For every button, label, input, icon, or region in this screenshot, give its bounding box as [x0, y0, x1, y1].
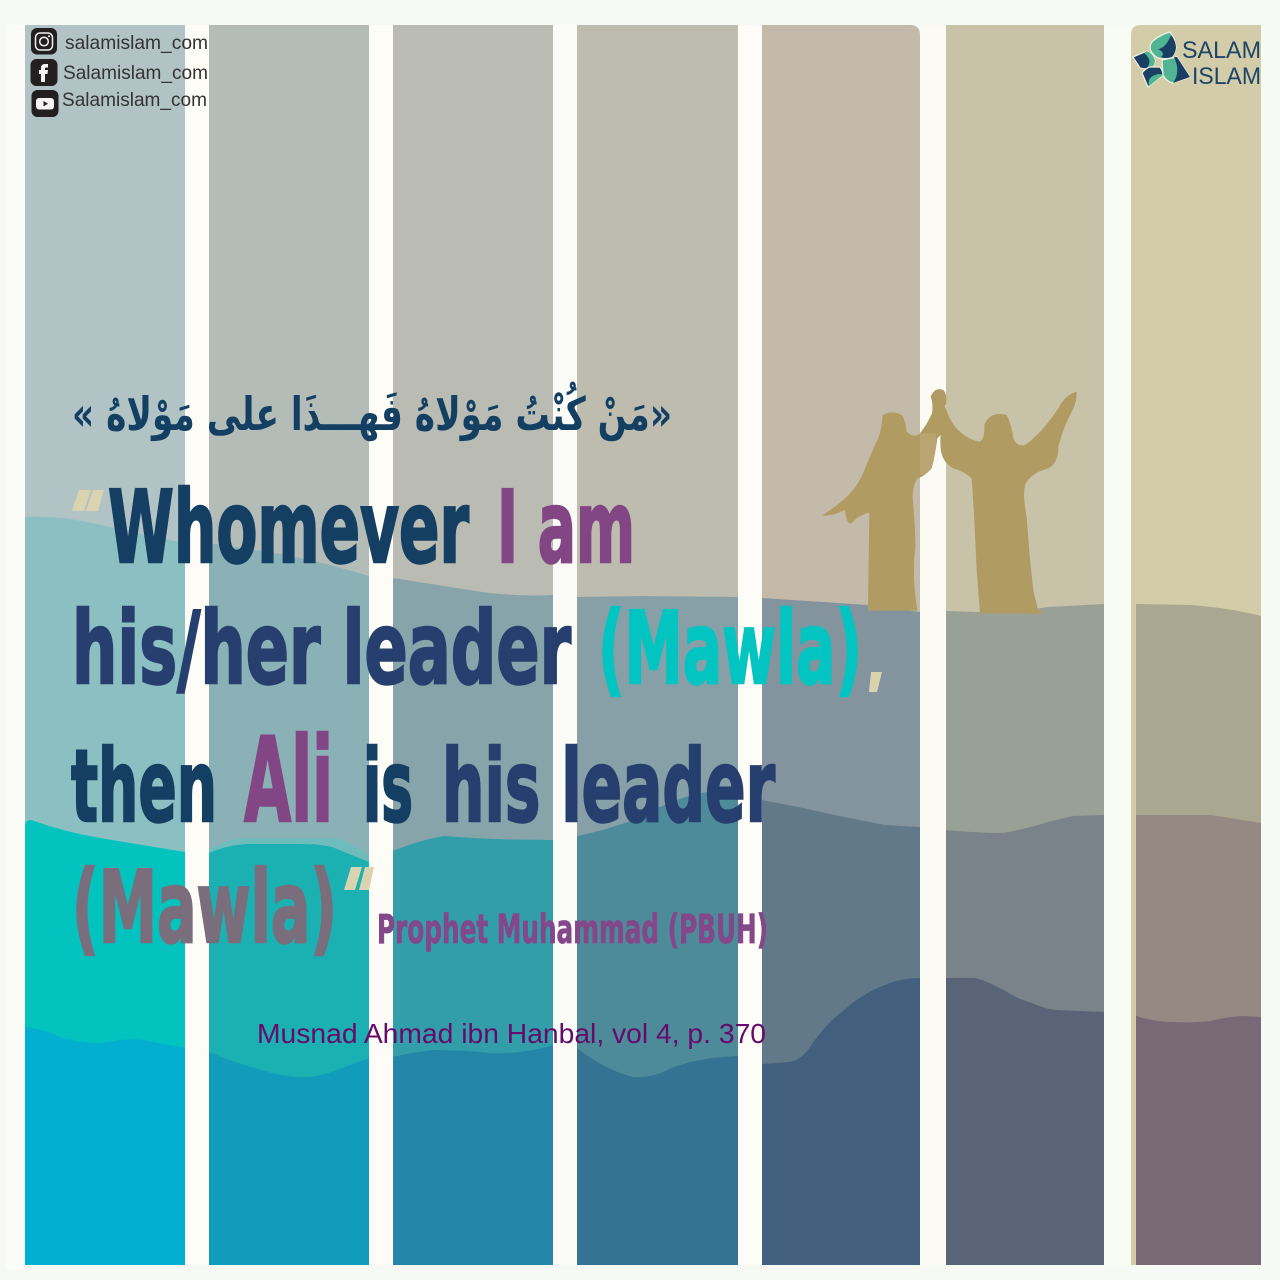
icon: facebook — [30, 59, 58, 86]
line 4: (Mawla): (Mawla) — [72, 849, 337, 966]
logo: Salam Islam — [1133, 32, 1261, 90]
facebook handle: Salamislam_com — [63, 62, 208, 84]
line 2: his/her leader: his/her leader — [72, 590, 571, 707]
icon: two raised-hand figures — [822, 389, 1077, 614]
closing quote mark — [344, 867, 374, 890]
panel: column 2 — [209, 25, 369, 1265]
line 3: Ali: Ali — [244, 712, 333, 849]
attribution: Prophet Muhammad (PBUH) — [377, 907, 768, 953]
logo mark — [1133, 32, 1190, 87]
icon: instagram — [31, 28, 57, 54]
youtube handle: Salamislam_com — [62, 89, 207, 111]
comma — [869, 672, 882, 692]
logo word: Salam: SALAM — [1182, 37, 1261, 64]
instagram handle: salamislam_com — [65, 32, 208, 54]
line 2: (Mawla): (Mawla) — [598, 590, 862, 707]
line 1: Whomever: Whomever — [108, 469, 469, 586]
social handles — [30, 28, 208, 117]
panel: column 3 — [393, 25, 553, 1265]
line 3: his leader: his leader — [442, 728, 775, 845]
panel: column 1 — [25, 25, 185, 1265]
logo word: Islam: ISLAM — [1192, 63, 1261, 90]
source citation: Musnad Ahmad ibn Hanbal, vol 4, p. 370 — [257, 1018, 766, 1049]
line 1: I am: I am — [497, 469, 635, 586]
arabic hadith text: «مَنْ كُنْتُ مَوْلاهُ فَهـــذَا على مَوْلاهُ » — [72, 381, 672, 441]
panel: column 7 — [1131, 25, 1261, 1265]
english quote — [71, 469, 882, 966]
opening quote mark — [72, 490, 104, 511]
panel: column 4 — [577, 25, 738, 1265]
line 3: is: is — [363, 728, 413, 845]
panel: column 6 — [946, 25, 1104, 1265]
icon: youtube — [32, 90, 58, 117]
panel: column 5 — [762, 25, 920, 1265]
line 3: then: then — [71, 728, 217, 845]
